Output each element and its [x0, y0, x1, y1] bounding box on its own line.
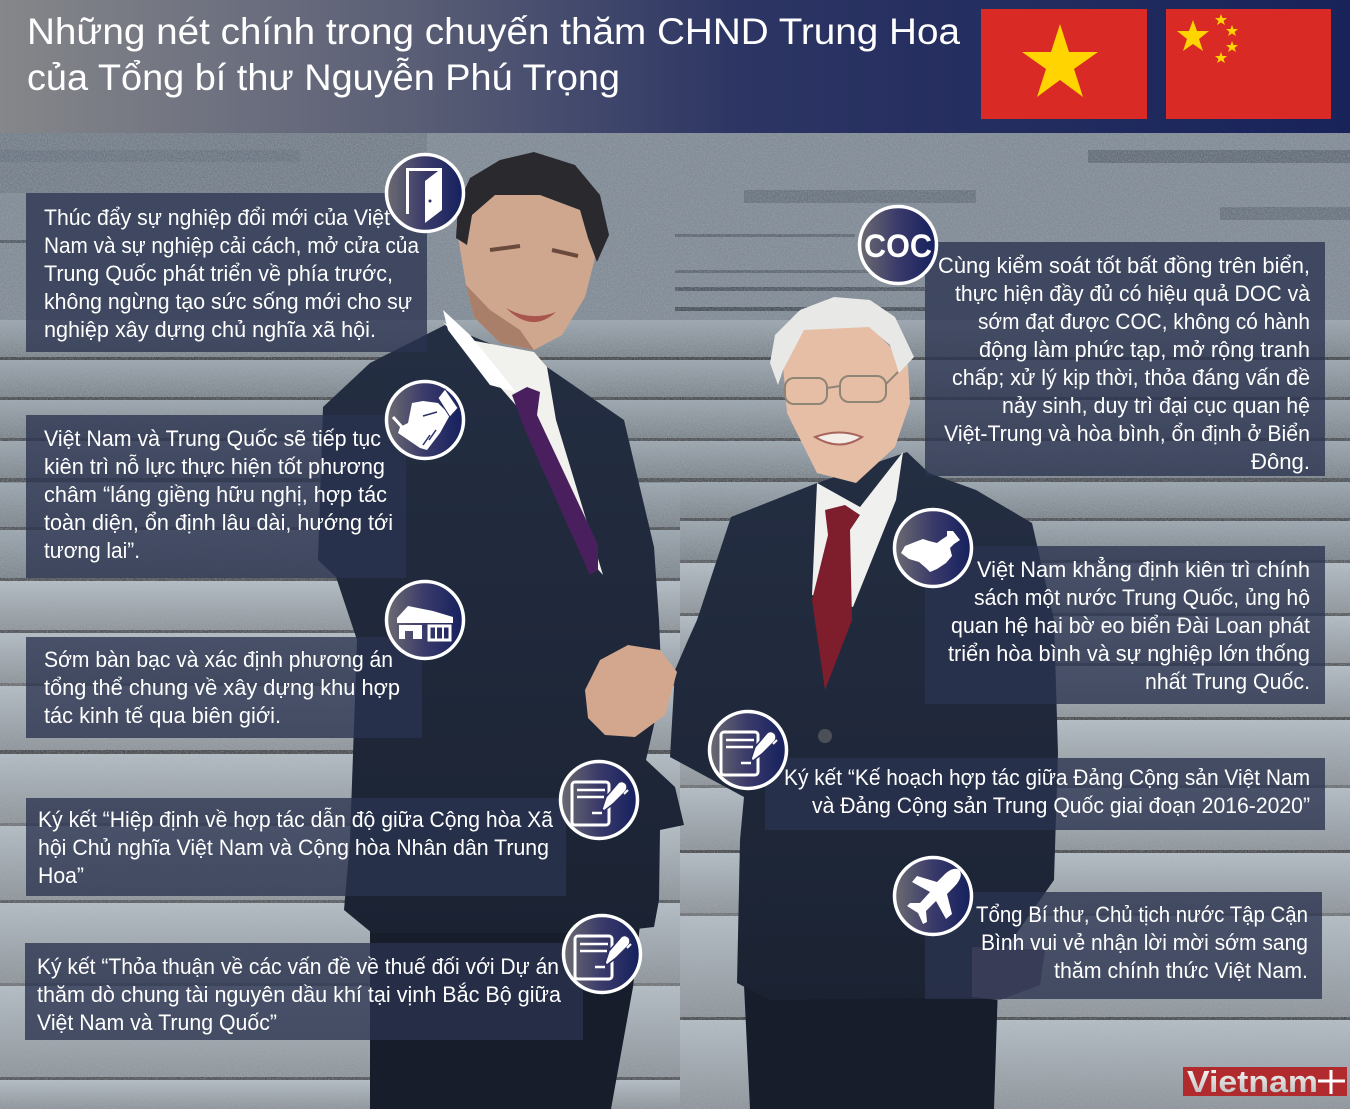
panel: lời mời sang thăm: thăm chính thức Việt Nam. [1054, 958, 1308, 983]
panel: lời mời sang thăm [925, 892, 1322, 999]
panel: kế hoạch hợp tác Đảng: Ký kết “Kế hoạch hợp tác giữa Đảng Cộng sản Việt Nam [784, 765, 1310, 790]
panel: hiệp định dẫn độ: hội Chủ nghĩa Việt Nam và Cộng hòa Nhân dân Trung [38, 835, 549, 860]
panel: hiệp định dẫn độ [26, 798, 566, 896]
panel: láng giềng [26, 415, 406, 578]
panel: kế hoạch hợp tác Đảng [765, 758, 1325, 830]
panel: láng giềng: Việt Nam và Trung Quốc sẽ tiếp tục [44, 426, 381, 451]
panel: thuế dầu khí [25, 943, 583, 1040]
title: của Tổng bí thư Nguyễn Phú Trọng [27, 57, 620, 98]
logo: VietnamPlus: Vietnam [1187, 1064, 1318, 1099]
panel: kế hoạch hợp tác Đảng: và Đảng Cộng sản Trung Quốc giai đoạn 2016-2020” [812, 793, 1310, 818]
icon: COC [860, 206, 936, 284]
panel: láng giềng: toàn diện, ổn định lâu dài, hướng tới [44, 510, 393, 535]
panel: một nước Trung Quốc: quan hệ hai bờ eo biển Đài Loan phát [951, 613, 1310, 638]
flag: Vietnam [981, 9, 1147, 119]
icon: signing [560, 762, 638, 838]
panel: biển đông [925, 242, 1325, 476]
handshake [585, 645, 677, 737]
panel: biển đông: sớm đạt được COC, không có hành [978, 309, 1310, 334]
panel: biển đông: Đông. [1251, 449, 1310, 474]
panel: khu hợp tác [26, 637, 422, 738]
right leader's hand [972, 947, 1045, 1000]
person: left leader [318, 152, 684, 1109]
panel: biển đông: chấp; xử lý kịp thời, thỏa đáng vấn đề [952, 365, 1310, 390]
icon: airplane [894, 858, 972, 934]
flag: China [1166, 9, 1331, 119]
header bar [0, 0, 1350, 133]
panel: lời mời sang thăm: Bình vui vẻ nhận lời mời sớm sang [981, 930, 1308, 955]
panel: đổi mới [26, 193, 427, 352]
panel: hiệp định dẫn độ: Hoa” [38, 863, 84, 888]
title: Những nét chính trong chuyến thăm CHND Trung Hoa [27, 11, 960, 52]
panel: đổi mới: Thúc đẩy sự nghiệp đổi mới của Việt [44, 205, 390, 230]
icon: door [386, 154, 464, 232]
panel: hiệp định dẫn độ: Ký kết “Hiệp định về hợp tác dẫn độ giữa Cộng hòa Xã [38, 807, 554, 832]
panel: khu hợp tác: tác kinh tế qua biên giới. [44, 703, 281, 728]
panel: lời mời sang thăm: Tổng Bí thư, Chủ tịch nước Tập Cận [976, 902, 1308, 927]
panel: biển đông: Việt-Trung và hòa bình, ổn định ở Biển [944, 421, 1310, 446]
panel: biển đông: Cùng kiểm soát tốt bất đồng trên biển, [938, 253, 1310, 278]
panel: đổi mới: Trung Quốc phát triển về phía trước, [44, 261, 393, 286]
person: right leader [670, 297, 1058, 1109]
panel: láng giềng: tương lai”. [44, 538, 140, 563]
panel: một nước Trung Quốc [925, 546, 1325, 704]
panel: thuế dầu khí: Việt Nam và Trung Quốc” [37, 1010, 277, 1035]
icon: China map [894, 510, 972, 586]
panel: láng giềng: châm “láng giềng hữu nghị, hợp tác [44, 482, 387, 507]
panel: một nước Trung Quốc: nhất Trung Quốc. [1145, 669, 1310, 694]
panel: đổi mới: Nam và sự nghiệp cải cách, mở cửa của [44, 233, 420, 258]
icon: signing [710, 712, 786, 788]
panel: biển đông: thực hiện đầy đủ có hiệu quả DOC và [955, 281, 1311, 306]
icon: handshake [386, 382, 464, 458]
panel: đổi mới: không ngừng tạo sức sống mới cho sự [44, 289, 412, 314]
panel: biển đông: động làm phức tạp, mở rộng tranh [979, 337, 1310, 362]
panel: khu hợp tác: tổng thể chung về xây dựng khu hợp [44, 675, 400, 700]
icon: COC: COC [864, 228, 932, 264]
panel: thuế dầu khí: Ký kết “Thỏa thuận về các vấn đề về thuế đối với Dự án [37, 954, 559, 979]
panel: một nước Trung Quốc: sách một nước Trung Quốc, ủng hộ [974, 585, 1310, 610]
icon: signing [564, 916, 640, 992]
panel: khu hợp tác: Sớm bàn bạc và xác định phương án [44, 647, 393, 672]
panel: thuế dầu khí: thăm dò chung tài nguyên dầu khí tại vịnh Bắc Bộ giữa [37, 982, 562, 1007]
panel: đổi mới: nghiệp xây dựng chủ nghĩa xã hội. [44, 317, 376, 342]
panel: láng giềng: kiên trì nỗ lực thực hiện tốt phương [44, 454, 385, 479]
icon: border economic zone buildings [386, 582, 464, 658]
panel: biển đông: nảy sinh, duy trì đại cục quan hệ [1002, 393, 1310, 418]
panel: một nước Trung Quốc: Việt Nam khẳng định kiên trì chính [977, 557, 1310, 582]
panel: một nước Trung Quốc: triển hòa bình và sự nghiệp lớn thống [948, 641, 1310, 666]
